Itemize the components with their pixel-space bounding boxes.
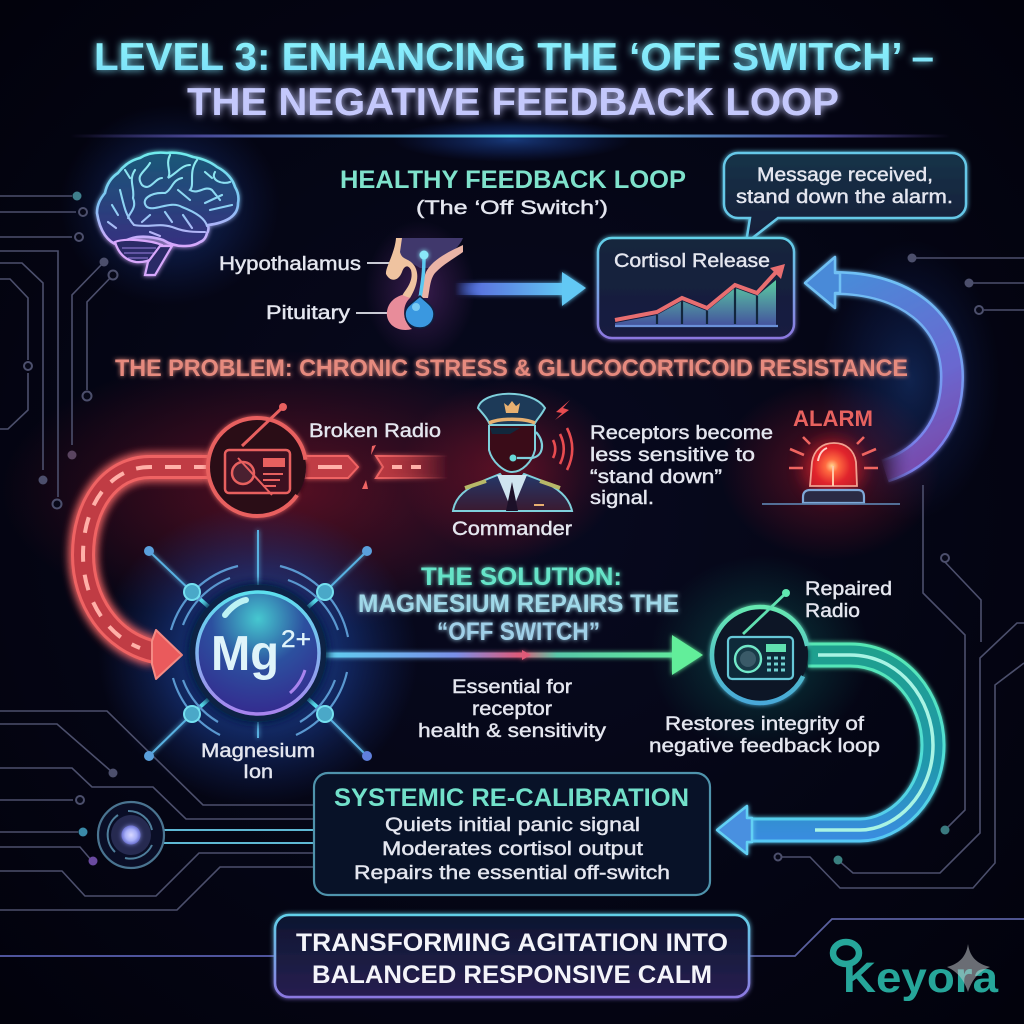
panel: transforming agitation: BALANCED RESPONSIVE CALM [312,961,712,989]
icon: hypothalamus and pituitary gland [386,238,463,330]
text: restores integrity: Restores integrity of [665,713,865,735]
title divider [70,134,950,138]
label: repaired radio: Repaired [805,578,892,600]
circuit traces: lower left with target node [0,711,313,956]
title: LEVEL 3: ENHANCING THE ‘OFF SWITCH’ – [94,36,934,79]
logo: keyora: Keyora [843,954,999,1002]
label: repaired radio: Radio [805,600,860,622]
right side of broken pipe [305,456,448,478]
callout: message received [724,153,966,243]
panel: systemic re-calibration: SYSTEMIC RE-CALIBRATION [334,784,689,812]
heading: the solution: “OFF SWITCH” [437,618,600,646]
label: repaired radio [805,578,892,622]
icon: alarm siren [762,406,900,504]
chart: rising cortisol line [615,264,785,326]
icon: alarm siren: ALARM [793,406,873,431]
label: magnesium ion [201,740,315,783]
text: essential for receptor health: Essential for [452,676,573,698]
label: pituitary [266,302,395,324]
panel: systemic re-calibration: Quiets initial panic signal [385,814,640,836]
panel: systemic re-calibration [314,773,710,895]
text: receptors become less sensitive: Receptors become [590,422,773,444]
circuit traces: upper left [0,192,118,508]
icon: magnesium ion: 2+ [281,626,311,653]
text: restores integrity: negative feedback loop [649,735,880,757]
arrow: magnesium to repaired radio [324,635,703,675]
text: receptors become less sensitive: signal. [590,487,654,509]
circuit traces: right [750,254,1024,956]
heading: the solution [358,563,679,646]
label: magnesium ion: Ion [243,761,273,783]
heading: healthy feedback loop: (The ‘Off Switch’) [416,197,608,219]
text: receptors become less sensitive: “stand down” [590,466,722,488]
heading: healthy feedback loop: HEALTHY FEEDBACK LOOP [340,166,686,194]
label: pituitary: Pituitary [266,302,350,324]
icon: commander [453,394,572,511]
panel: transforming agitation [275,915,749,997]
panel: cortisol release [598,238,794,338]
icon: brain [97,153,238,275]
heading: the solution: MAGNESIUM REPAIRS THE [358,590,679,618]
title [94,36,934,124]
panel: systemic re-calibration: Moderates cortisol output [382,838,644,860]
text: receptors become less sensitive [590,422,773,509]
label: hypothalamus: Hypothalamus [219,253,361,275]
heading: the problem: THE PROBLEM: CHRONIC STRESS & GLUCOCORTICOID RESISTANCE [115,355,908,382]
icon: magnesium ion: Mg [211,627,279,681]
text: essential for receptor health: health & sensitivity [418,720,606,742]
arrow: repaired signal pipe [717,655,933,854]
text: restores integrity [649,713,880,757]
icon: broken radio [208,403,306,516]
heading: healthy feedback loop [340,166,686,219]
panel: cortisol release: Cortisol Release [614,250,770,272]
heading: the solution: THE SOLUTION: [421,563,622,591]
panel: systemic re-calibration: Repairs the essential off-switch [354,862,670,884]
text: essential for receptor health [418,676,606,742]
arrow: red broken signal pipe [83,445,448,679]
title: THE NEGATIVE FEEDBACK LOOP [187,81,839,124]
icon: magnesium ion [144,530,372,761]
text: essential for receptor health: receptor [472,698,553,720]
panel: transforming agitation: TRANSFORMING AGITATION INTO [296,929,728,957]
icon: repaired radio [712,589,808,703]
label: magnesium ion: Magnesium [201,740,315,762]
callout: message received: Message received, [757,164,933,186]
label: broken radio: Broken Radio [309,420,441,442]
arrow: pituitary to cortisol [455,272,586,306]
label: commander: Commander [452,518,573,540]
text: receptors become less sensitive: less sensitive to [590,444,755,466]
callout: message received: stand down the alarm. [736,186,953,208]
arrow: alarm back to cortisol [805,257,952,471]
